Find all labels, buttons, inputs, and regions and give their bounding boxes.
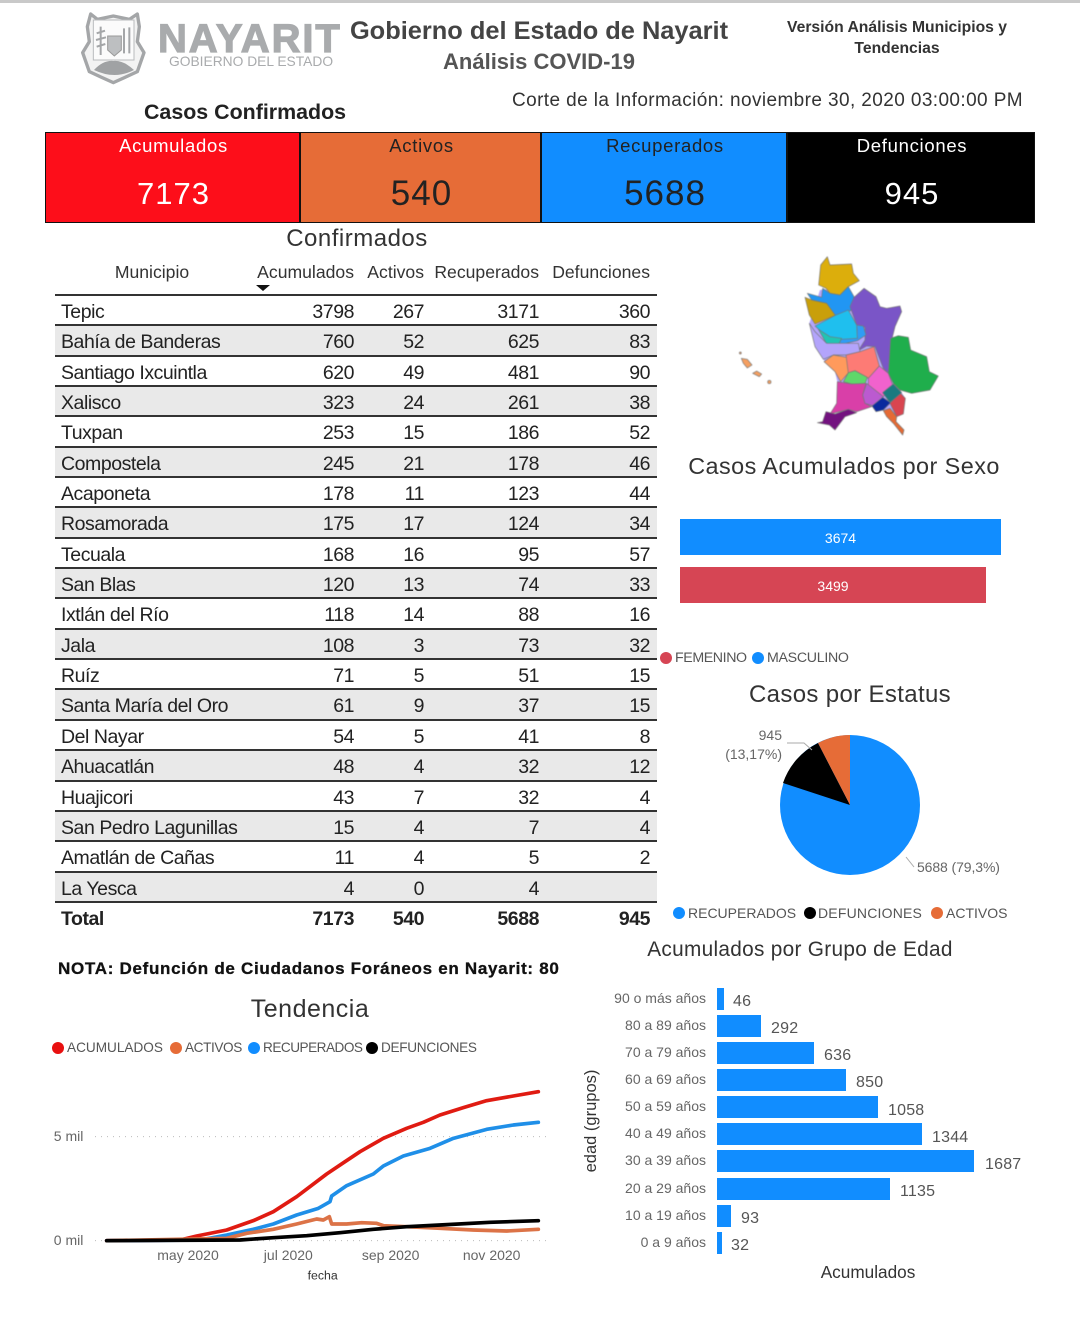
- table: municipios: 4: [640, 817, 650, 839]
- table column headers: [55, 262, 657, 296]
- table: municipios: 90: [629, 362, 650, 384]
- table: municipios: Bahía de Banderas: [61, 331, 220, 353]
- table: municipios: Total: [61, 908, 104, 930]
- table: municipios: 7: [414, 786, 424, 808]
- line chart: tendencia: may 2020: [157, 1247, 219, 1263]
- table: municipios: 15: [333, 817, 354, 839]
- logo: Nayarit coat of arms: [81, 12, 146, 84]
- line chart: tendencia: 0 mil: [54, 1232, 83, 1248]
- text: 1344: [932, 1129, 968, 1146]
- table: municipios: 124: [508, 513, 539, 535]
- table: municipios: 12: [629, 756, 650, 778]
- table: municipios: 73: [518, 635, 539, 657]
- heading: casos confirmados: Casos Confirmados: [144, 100, 346, 124]
- table: municipios: 15: [629, 665, 650, 687]
- text: 0 a 9 años: [641, 1234, 706, 1250]
- table: municipios: 83: [629, 331, 650, 353]
- table: municipios: Ahuacatlán: [61, 756, 154, 778]
- line chart: tendencia: 5 mil: [54, 1128, 83, 1144]
- line chart: tendencia: nov 2020: [463, 1247, 521, 1263]
- kpi: recuperados: [541, 132, 787, 223]
- table: municipios: 3798: [312, 301, 354, 323]
- table: municipios: 9: [414, 695, 424, 717]
- text: 70 a 79 años: [625, 1044, 706, 1060]
- table: municipios: 71: [333, 665, 354, 687]
- text: 80 a 89 años: [625, 1017, 706, 1033]
- table: municipios: 2: [640, 847, 650, 869]
- kpi: activos: [300, 132, 541, 223]
- table: municipios: Xalisco: [61, 392, 121, 414]
- legend: tendencia: RECUPERADOS: [263, 1040, 362, 1055]
- table: municipios: 11: [335, 847, 354, 869]
- kpi: activos: Activos: [389, 135, 454, 156]
- table column headers: Municipio: [115, 262, 189, 282]
- kpi: activos: 540: [391, 174, 452, 213]
- table column headers: Recuperados: [434, 262, 539, 282]
- age bar: 0 a 9: [641, 1232, 749, 1254]
- table: municipios: 88: [518, 604, 539, 626]
- legend: estatus: RECUPERADOS: [688, 905, 796, 921]
- text: 10 a 19 años: [625, 1207, 706, 1223]
- kpi: recuperados: Recuperados: [606, 135, 724, 156]
- table: municipios: 4: [529, 878, 539, 900]
- axis title: acumulados: Acumulados: [821, 1262, 915, 1282]
- legend: tendencia: DEFUNCIONES: [381, 1040, 477, 1055]
- table: municipios: 14: [403, 604, 424, 626]
- age bar: 80 a 89: [625, 1015, 798, 1037]
- line chart: tendencia: fecha: [308, 1268, 338, 1282]
- table: municipios: 186: [508, 422, 539, 444]
- map of Nayarit municipalities: [738, 256, 940, 436]
- table: municipios: 16: [403, 544, 424, 566]
- table: municipios: 95: [518, 544, 539, 566]
- table: municipios: 267: [393, 301, 424, 323]
- table: municipios: 245: [323, 453, 354, 475]
- table: municipios: La Yesca: [61, 878, 137, 900]
- kpi: acumulados: Acumulados: [119, 135, 228, 156]
- table: municipios: 34: [629, 513, 650, 535]
- age bar: 40 a 49: [625, 1123, 968, 1146]
- table: municipios: Ruíz: [61, 665, 99, 687]
- legend: sexo: MASCULINO: [767, 650, 849, 666]
- table: municipios: 175: [323, 513, 354, 535]
- table: municipios: 625: [508, 331, 539, 353]
- table: municipios: 74: [518, 574, 539, 596]
- table: municipios: 57: [629, 544, 650, 566]
- bar: femenino: [680, 567, 986, 603]
- table: municipios: 945: [619, 908, 650, 930]
- top edge shadow: [0, 0, 1080, 3]
- table: municipios: 178: [323, 483, 354, 505]
- table: municipios: 32: [629, 635, 650, 657]
- kpi: defunciones: Defunciones: [857, 135, 967, 156]
- axis title: edad: edad (grupos): [582, 1070, 600, 1172]
- table: municipios: 11: [405, 483, 424, 505]
- table: municipios: 54: [333, 726, 354, 748]
- kpi: acumulados: 7173: [137, 176, 210, 211]
- heading: casos acumulados por sexo: Casos Acumulados por Sexo: [688, 453, 1000, 479]
- table: municipios: 13: [403, 574, 424, 596]
- logo wordmark: NAYARIT: [158, 17, 342, 61]
- text: 636: [824, 1047, 851, 1064]
- legend: estatus: DEFUNCIONES: [818, 905, 922, 921]
- table: municipios: 3171: [497, 301, 539, 323]
- age bar: 90 o más: [614, 988, 751, 1010]
- heading: confirmados: Confirmados: [286, 225, 428, 252]
- note: NOTA: Defunción de Ciudadanos Foráneos en Nayarit: 80: [58, 959, 560, 978]
- text: 40 a 49 años: [625, 1125, 706, 1141]
- pie chart: estatus: 5688 (79,3%): [917, 859, 1000, 875]
- table: municipios: 46: [629, 453, 650, 475]
- bar: masculino: 3674: [825, 530, 856, 546]
- table: municipios: 4: [414, 756, 424, 778]
- line chart: tendencia: [54, 1090, 546, 1282]
- legend: sexo: [660, 650, 849, 666]
- table: municipios: 118: [324, 604, 354, 626]
- table: municipios: 44: [629, 483, 650, 505]
- table: municipios: 8: [640, 726, 650, 748]
- table: municipios: Tuxpan: [61, 422, 123, 444]
- table: municipios: Acaponeta: [61, 483, 150, 505]
- legend: estatus: ACTIVOS: [946, 905, 1007, 921]
- age bar: 50 a 59: [625, 1096, 924, 1119]
- text: 60 a 69 años: [625, 1071, 706, 1087]
- text: 20 a 29 años: [625, 1180, 706, 1196]
- table: municipios: Del Nayar: [61, 726, 144, 748]
- table: municipios: 52: [403, 331, 424, 353]
- version note: Tendencias: [854, 40, 940, 57]
- table: municipios: 253: [323, 422, 354, 444]
- table: municipios: 5: [414, 665, 424, 687]
- table: municipios: 0: [414, 878, 424, 900]
- line chart: tendencia: jul 2020: [263, 1247, 313, 1263]
- table: municipios: 32: [518, 756, 539, 778]
- pie chart: estatus: (13,17%): [725, 746, 782, 762]
- legend: tendencia: ACUMULADOS: [67, 1040, 163, 1055]
- version note: Versión Análisis Municipios y: [787, 19, 1007, 36]
- text: 292: [771, 1020, 798, 1037]
- table: municipios: 4: [640, 786, 650, 808]
- table: municipios: Santa María del Oro: [61, 695, 228, 717]
- legend: tendencia: ACTIVOS: [185, 1040, 242, 1055]
- text: 93: [741, 1210, 759, 1227]
- table column headers: Activos: [367, 262, 424, 282]
- table: municipios: Ixtlán del Río: [61, 604, 169, 626]
- text: 32: [731, 1237, 749, 1254]
- age bar: 60 a 69: [625, 1069, 883, 1091]
- text: 1687: [985, 1156, 1021, 1173]
- table: municipios: 620: [323, 362, 354, 384]
- heading: acumulados por grupo de edad: Acumulados por Grupo de Edad: [647, 938, 953, 961]
- table: municipios: 4: [414, 817, 424, 839]
- table: municipios: 5: [414, 726, 424, 748]
- text: 1135: [900, 1183, 935, 1200]
- table: municipios: 41: [518, 726, 539, 748]
- legend: estatus: [673, 905, 1007, 921]
- age bar: 10 a 19: [625, 1205, 759, 1227]
- table: municipios: 17: [403, 513, 424, 535]
- bar: masculino: [680, 519, 1001, 555]
- legend: sexo: FEMENINO: [675, 650, 747, 666]
- table: municipios: 3: [414, 635, 424, 657]
- kpi: defunciones: [787, 132, 1035, 223]
- age bar: 30 a 39: [625, 1150, 1021, 1173]
- table: municipios: Compostela: [61, 453, 161, 475]
- table: municipios: San Blas: [61, 574, 135, 596]
- table: municipios: 7173: [312, 908, 354, 930]
- table: municipios: Tepic: [61, 301, 104, 323]
- table: municipios: Jala: [61, 635, 95, 657]
- table: municipios: 4: [414, 847, 424, 869]
- legend: tendencia: [52, 1040, 477, 1055]
- table: municipios: 15: [403, 422, 424, 444]
- table: municipios: 51: [518, 665, 539, 687]
- kpi: recuperados: 5688: [624, 174, 706, 213]
- version note: [787, 19, 1007, 57]
- title: Gobierno del Estado de Nayarit: [350, 17, 728, 45]
- table: municipios: [55, 301, 657, 930]
- heading: casos por estatus: Casos por Estatus: [749, 681, 951, 708]
- table: municipios: 4: [344, 878, 354, 900]
- bar: femenino: 3499: [817, 578, 849, 594]
- heading: tendencia: Tendencia: [251, 995, 369, 1023]
- table: municipios: 48: [333, 756, 354, 778]
- table: municipios: 49: [403, 362, 424, 384]
- table: municipios: 43: [333, 786, 354, 808]
- table: municipios: 323: [323, 392, 354, 414]
- age bar: 70 a 79: [625, 1042, 851, 1064]
- text: 30 a 39 años: [625, 1152, 706, 1168]
- table: municipios: 123: [508, 483, 539, 505]
- text: 50 a 59 años: [625, 1098, 706, 1114]
- text: 850: [856, 1074, 883, 1091]
- table: municipios: 21: [403, 453, 424, 475]
- logo wordmark: GOBIERNO DEL ESTADO: [169, 54, 333, 69]
- table: municipios: 37: [518, 695, 539, 717]
- cut-off date: Corte de la Información: noviembre 30, 2020 03:00:00 PM: [512, 90, 1023, 111]
- table: municipios: 15: [629, 695, 650, 717]
- pie chart: estatus: [725, 727, 1000, 875]
- table: municipios: Huajicori: [61, 786, 133, 808]
- table: municipios: Rosamorada: [61, 513, 168, 535]
- table: municipios: 52: [629, 422, 650, 444]
- table: municipios: 168: [323, 544, 354, 566]
- table: municipios: 108: [323, 635, 354, 657]
- table: municipios: 24: [403, 392, 424, 414]
- kpi: defunciones: 945: [885, 176, 939, 211]
- table: municipios: 33: [629, 574, 650, 596]
- table: municipios: 5688: [497, 908, 539, 930]
- text: 1058: [888, 1102, 924, 1119]
- table: municipios: 178: [508, 453, 539, 475]
- table: municipios: 760: [323, 331, 354, 353]
- table: municipios: 16: [629, 604, 650, 626]
- table: municipios: 38: [629, 392, 650, 414]
- table: municipios: 481: [508, 362, 539, 384]
- table: municipios: 5: [529, 847, 539, 869]
- text: 90 o más años: [614, 990, 706, 1006]
- table: municipios: 540: [393, 908, 424, 930]
- kpi: acumulados: [45, 132, 300, 223]
- table column headers: Defunciones: [552, 262, 650, 282]
- table: municipios: 32: [518, 786, 539, 808]
- table: municipios: San Pedro Lagunillas: [61, 817, 237, 839]
- subtitle: Análisis COVID-19: [443, 49, 635, 74]
- table: municipios: Santiago Ixcuintla: [61, 362, 207, 384]
- table: municipios: 7: [529, 817, 539, 839]
- pie chart: estatus: 945: [759, 727, 782, 743]
- text: 46: [733, 993, 751, 1010]
- age bar: 20 a 29: [625, 1178, 935, 1200]
- table: municipios: Tecuala: [61, 544, 125, 566]
- table: municipios: 120: [323, 574, 354, 596]
- table column headers: Acumulados: [257, 262, 354, 282]
- table: municipios: 61: [333, 695, 354, 717]
- line chart: tendencia: sep 2020: [362, 1247, 420, 1263]
- table: municipios: 261: [508, 392, 539, 414]
- table: municipios: Amatlán de Cañas: [61, 847, 214, 869]
- table: municipios: 360: [619, 301, 650, 323]
